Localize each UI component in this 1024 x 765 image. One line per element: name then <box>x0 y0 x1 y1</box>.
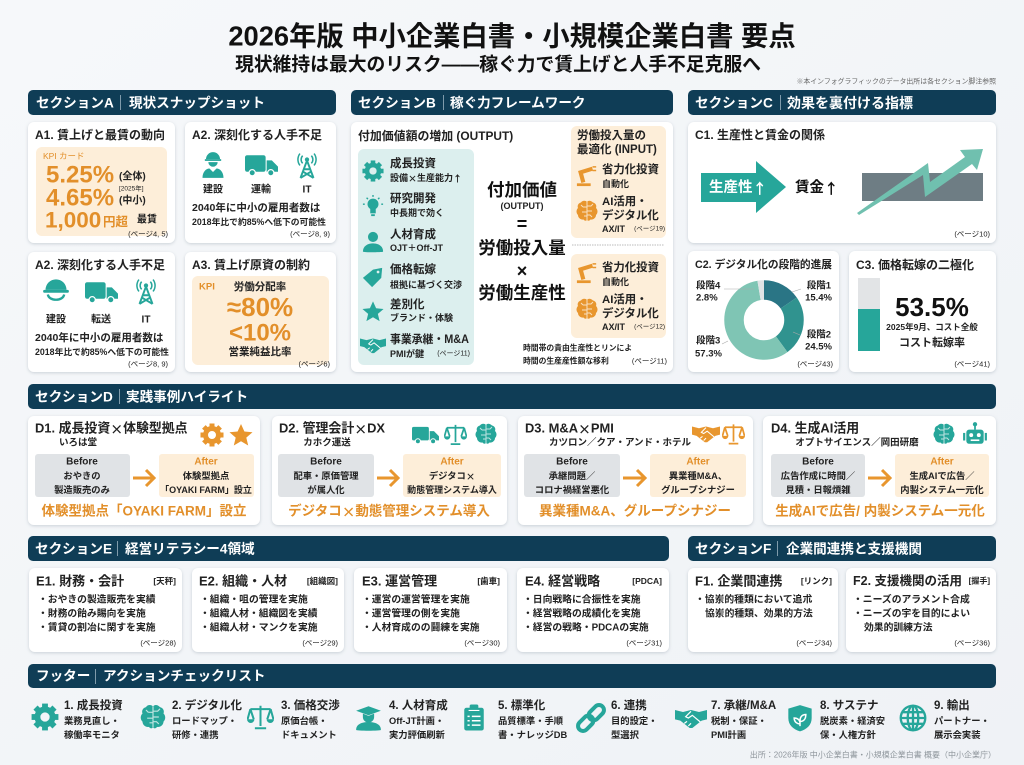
panel: E1 finance: (ページ28) <box>140 638 177 648</box>
panel: C2 digitalization stages: 15.4% <box>805 292 833 304</box>
checklist item 3: 3. 価格交渉 <box>281 698 340 712</box>
icon: handshake <box>692 426 720 442</box>
KPI card: 最賃 <box>137 212 157 226</box>
icon: star <box>362 301 384 321</box>
checklist item 9 <box>901 698 990 740</box>
donut chart <box>734 290 794 350</box>
panel: A3 wage funding constraints <box>185 252 336 372</box>
output levers list: PMIが鍵 <box>390 348 424 359</box>
section header C <box>688 90 996 115</box>
panel: E4 strategy: (ページ31) <box>626 638 663 648</box>
icon: worker <box>202 152 224 178</box>
before box: Before <box>802 456 834 468</box>
before box <box>35 454 130 497</box>
panel: C1 productivity and wages: C1. 生産性と賃金の関係 <box>695 127 825 142</box>
section header B: 稼ぐ力フレームワーク <box>450 96 586 110</box>
panel: C2 digitalization stages: 24.5% <box>805 342 833 352</box>
panel: A2 labour shortage second card: (ページ8, 9) <box>128 360 168 368</box>
panel: C3 price pass-through: コスト転嫁率 <box>899 335 965 349</box>
panel: D3 case: D3. M&A×PMI <box>525 418 614 438</box>
section header D <box>28 384 996 409</box>
title: 2026年版 中小企業白書・小規模企業白書 要点 <box>228 20 796 52</box>
icon: robot <box>963 422 987 444</box>
panel: F2 support organizations: [握手] <box>969 576 990 586</box>
checklist item 4 <box>356 698 448 740</box>
panel: D3 case <box>518 416 753 525</box>
panel: B framework <box>351 122 673 372</box>
panel: D2 case: カホク運送 <box>303 436 351 448</box>
panel: A1 wage trends: A1. 賃上げと最賃の動向 <box>35 127 165 142</box>
icon: scale <box>722 424 745 444</box>
panel: E4 strategy: ・経営の戦略・PDCAの実施 <box>523 620 649 634</box>
checklist item 7: 7. 承継/M&A <box>711 698 776 712</box>
section header footer: フッター <box>36 668 90 684</box>
output levers list: 差別化 <box>390 297 425 311</box>
checklist item 1: 1. 成長投資 <box>64 698 123 712</box>
before box <box>771 454 865 497</box>
icon: tag <box>363 268 382 287</box>
panel: D2 case: D2. 管理会計×DX <box>279 418 385 438</box>
icon: handshake <box>360 338 386 353</box>
panel: E4 strategy: ・経営戦略の成績化を実施 <box>523 606 641 620</box>
checklist item 5: 5. 標準化 <box>498 698 546 712</box>
panel: D4 case <box>763 416 996 525</box>
before box: コロナ禍経営悪化 <box>535 484 610 495</box>
panel: A2 labour shortage second card: 2018年比で約85%へ低下の可能性 <box>35 346 169 357</box>
after box <box>403 454 501 497</box>
checklist item 8: 脱炭素・経済安 <box>820 715 885 726</box>
panel: C2 digitalization stages: 段階4 <box>696 280 721 292</box>
panel: E1 finance: [天秤] <box>153 576 176 586</box>
input box 1 <box>571 126 666 238</box>
icon: star <box>230 424 252 446</box>
section header F: 企業間連携と支援機関 <box>786 540 922 556</box>
panel: C3 price pass-through: (ページ41) <box>954 360 991 368</box>
checklist item 6: 6. 連携 <box>611 698 647 712</box>
section header B: セクションB <box>358 96 436 110</box>
icon: robot arm <box>577 264 596 283</box>
before box: 見積・日報煩雑 <box>785 484 851 495</box>
output levers list: 成長投資 <box>390 156 436 170</box>
panel: E3 operations <box>354 568 507 652</box>
checklist item 1 <box>32 698 123 740</box>
after box: 内製システム一元化 <box>900 484 984 495</box>
checklist item 3: ドキュメント <box>281 730 337 740</box>
checklist item 5 <box>464 698 567 740</box>
panel: E2 organization <box>192 568 344 652</box>
panel: E1 finance: ・財務の飴み賜向を実施 <box>38 606 146 620</box>
input box 1: 最適化 (INPUT) <box>577 142 657 156</box>
panel: A2 labour shortage second card: 2040年に中小の雇用者数は <box>35 331 164 344</box>
before box: おやきの <box>63 471 101 481</box>
checklist item 9: 展示会実装 <box>934 729 981 740</box>
panel: E3 operations: ・運営管理の側を実施 <box>362 606 460 620</box>
checklist item 7: 税制・保証・ <box>711 715 767 726</box>
icon: brain <box>476 424 496 444</box>
after box: After <box>194 456 218 468</box>
panel: F2 support organizations: F2. 支援機関の活用 <box>853 573 962 588</box>
icon: truck <box>245 155 278 176</box>
checklist item 5: 品質標準・手順 <box>498 715 564 726</box>
panel: F2 support organizations: ・ニーズのアラメント合成 <box>853 592 970 606</box>
panel: D4 case: D4. 生成AI活用 <box>771 420 859 436</box>
output levers list: 研究開発 <box>390 191 436 205</box>
icon: bulb <box>363 195 383 216</box>
checklist item 4: 実力評価刷新 <box>389 729 445 740</box>
panel: E2 organization: [組織図] <box>307 576 338 586</box>
input box 1: AI活用・ <box>602 194 648 208</box>
icon: person <box>363 232 383 252</box>
panel: A2 labour shortage: 2040年に中小の雇用者数は <box>192 201 321 214</box>
section header F: セクションF <box>695 542 771 556</box>
input box 2: (ページ12) <box>634 322 665 330</box>
checklist item 1: 業務見直し・ <box>64 715 120 726</box>
equation: 労働投入量 <box>478 238 566 258</box>
input box 2: AX/IT <box>602 322 626 332</box>
panel: A2 labour shortage second card: A2. 深刻化する人手不足 <box>35 257 165 272</box>
arrow: productivity: 生産性↑ <box>709 178 767 198</box>
panel: D2 case: デジタコ×動態管理システム導入 <box>288 501 490 521</box>
before box: 配車・原価管理 <box>293 470 359 481</box>
output levers list: (ページ11) <box>437 350 470 358</box>
checklist item 2: 研修・連携 <box>172 729 218 740</box>
checklist item 2: 2. デジタル化 <box>172 698 243 712</box>
KPI card <box>36 147 167 236</box>
input box 2: 自動化 <box>602 276 629 287</box>
KPI card: 4.65% <box>46 184 114 212</box>
panel: C2 digitalization stages: C2. デジタル化の段階的進展 <box>695 258 832 271</box>
KPI card: 1,000 <box>45 208 101 232</box>
icon: helmet <box>43 279 69 300</box>
before box: 広告作成に時間／ <box>781 470 856 481</box>
panel: C1 productivity and wages: (ページ10) <box>954 230 991 238</box>
checklist item 2 <box>141 698 243 740</box>
checklist item 3: 原価台帳・ <box>281 715 328 726</box>
icon: gear <box>362 160 384 182</box>
panel: E3 operations: E3. 運営管理 <box>362 574 437 588</box>
before box: 製造販売のみ <box>54 484 110 495</box>
checklist item 5: 書・ナレッジDB <box>498 729 567 740</box>
checklist item 3 <box>247 698 340 740</box>
before box: Before <box>310 456 342 468</box>
panel: C3 price pass-through: 53.5% <box>895 292 969 322</box>
input box 1: (ページ19) <box>634 224 665 232</box>
panel: E4 strategy: ・日向戦略に合振性を実施 <box>523 592 641 606</box>
panel: A2 labour shortage <box>185 122 336 243</box>
KPI card: 営業純益比率 <box>228 345 292 358</box>
arrow: productivity <box>701 161 786 213</box>
after box: グループシナジー <box>661 484 735 495</box>
source note: ※本インフォグラフィックのデータ出所は各セクション脚注参照 <box>797 76 996 86</box>
panel: D1 case: D1. 成長投資×体験型拠点 <box>35 418 188 438</box>
source credit: 出所：2026年版 中小企業白書・小規模企業白書 概要（中小企業庁） <box>750 750 996 760</box>
icon: tower <box>137 280 155 304</box>
panel: F1 inter-firm collaboration: (ページ34) <box>796 638 833 648</box>
panel: D3 case: カツロン／クア・アンド・ホテル <box>549 438 692 448</box>
footnote: (ページ11) <box>632 356 667 366</box>
panel: C3 price pass-through: 2025年9月、コスト全般 <box>886 322 978 332</box>
panel: E2 organization: ・組織人材・組織図を実績 <box>200 606 318 620</box>
before box: が属人化 <box>307 484 345 495</box>
panel: A2 labour shortage second card: IT <box>142 314 150 326</box>
panel: D1 case: いろは堂 <box>59 436 97 448</box>
output levers list: OJT＋Off-JT <box>390 243 444 253</box>
icon: robot arm <box>577 167 596 186</box>
KPI card: KPI <box>199 282 215 292</box>
panel: E3 operations: ・人材育成のの鬪練を実施 <box>362 620 480 634</box>
checklist item 6: 目的設定・ <box>611 715 658 726</box>
checklist item 8: 保・人権方針 <box>820 729 876 740</box>
panel: A2 labour shortage second card <box>28 252 175 372</box>
checklist item 2: ロードマップ・ <box>172 716 237 726</box>
checklist item 8: 8. サステナ <box>820 699 879 712</box>
panel: C2 digitalization stages: 段階2 <box>807 328 831 340</box>
after box <box>159 454 254 497</box>
panel: F2 support organizations: 効果的訓練方法 <box>864 620 933 634</box>
KPI card: (中小) <box>119 194 146 206</box>
checklist item 9: パートナー・ <box>934 716 990 726</box>
panel: C3 price pass-through <box>849 251 996 372</box>
panel: F2 support organizations <box>846 568 996 652</box>
checklist item 7 <box>675 698 776 740</box>
arrow <box>133 470 154 486</box>
panel: E2 organization: (ページ29) <box>302 638 339 648</box>
panel: C2 digitalization stages <box>688 251 839 372</box>
panel: A2 labour shortage: (ページ8, 9) <box>290 230 330 238</box>
panel: D1 case <box>28 416 260 525</box>
output levers list: 設備×生産能力↑ <box>390 172 462 184</box>
equation: 付加価値 <box>487 180 557 200</box>
panel: D3 case: 異業種M&A、グループシナジー <box>539 502 731 518</box>
input box 1: 自動化 <box>602 178 629 189</box>
panel: A2 labour shortage: 運輸 <box>251 182 271 196</box>
section header footer <box>28 664 996 688</box>
after box: 異業種M&A、 <box>669 470 727 481</box>
panel: A2 labour shortage: 2018年比で約85%へ低下の可能性 <box>192 216 326 227</box>
input box 2: 省力化投資 <box>602 260 660 274</box>
after box: 動態管理システム導入 <box>407 484 497 495</box>
KPI card <box>192 276 329 365</box>
panel: C1 productivity and wages <box>688 122 996 243</box>
input box 1: 労働投入量の <box>577 128 646 142</box>
icon: scale <box>444 425 467 444</box>
section header B <box>351 90 673 115</box>
checklist item 9: 9. 輸出 <box>934 698 970 712</box>
after box: デジタコ× <box>429 469 475 483</box>
section header A: セクションA <box>36 96 114 110</box>
after box: After <box>686 456 710 468</box>
checklist item 4: 4. 人材育成 <box>389 698 448 712</box>
panel: A2 labour shortage: A2. 深刻化する人手不足 <box>192 127 322 142</box>
panel: A1 wage trends <box>28 122 175 243</box>
panel: A1 wage trends: (ページ4, 5) <box>128 230 168 238</box>
equation: × <box>517 261 527 281</box>
panel: E1 finance: E1. 財務・会計 <box>36 574 124 588</box>
output levers list: 価格転嫁 <box>390 262 436 276</box>
checklist item 6 <box>576 698 658 740</box>
after box <box>650 454 746 497</box>
KPI card: (全体) <box>119 170 146 182</box>
section header F <box>688 536 996 561</box>
section header C: 効果を裏付ける指標 <box>787 95 913 111</box>
icon: gear <box>200 424 224 446</box>
footnote <box>523 342 667 366</box>
panel: F1 inter-firm collaboration: F1. 企業間連携 <box>695 574 782 588</box>
panel: A2 labour shortage second card: 建設 <box>46 312 66 326</box>
after box: 体験型拠点 <box>183 470 229 481</box>
panel: E2 organization: ・組織・咀の管理を実施 <box>200 592 308 606</box>
checklist item 6: 型選択 <box>611 729 640 740</box>
KPI card: KPI カード <box>43 151 85 161</box>
panel: E2 organization: ・組織人材・マンクを実施 <box>200 620 318 634</box>
section header footer: アクションチェックリスト <box>103 668 265 684</box>
panel: E4 strategy <box>517 568 669 652</box>
icon: brain <box>576 299 598 319</box>
panel: C2 digitalization stages: 2.8% <box>696 292 718 304</box>
before box: Before <box>556 456 588 468</box>
output levers list: ブランド・体験 <box>390 312 453 323</box>
panel: C1 productivity and wages: 賃金↑ <box>795 178 838 198</box>
section header C: セクションC <box>695 96 773 110</box>
panel: A2 labour shortage: IT <box>303 184 311 196</box>
panel: D4 case: 生成AIで広告/ 内製システム一元化 <box>775 502 985 518</box>
panel: E1 finance: ・おやきの製造販売を実績 <box>38 592 156 606</box>
footnote: 時間帯の貴由生産性とリンによ <box>523 342 632 352</box>
panel: E1 finance: ・賃貸の割冶に閑すを実施 <box>38 620 156 634</box>
after box: After <box>930 456 954 468</box>
input box 1: 省力化投資 <box>602 162 660 176</box>
panel: C2 digitalization stages: 段階3 <box>696 334 720 346</box>
output levers list: 人材育成 <box>390 227 436 241</box>
output levers list: 事業承継・M&A <box>390 332 469 346</box>
panel: D1 case: 体験型拠点「OYAKI FARM」設立 <box>41 502 247 518</box>
icon: brain <box>934 424 954 444</box>
subtitle: 現状維持は最大のリスク――稼ぐ力で賃上げと人手不足克服へ <box>235 54 761 74</box>
checklist item 4: Off-JT計画・ <box>389 715 444 726</box>
section header D: 実践事例ハイライト <box>126 388 248 404</box>
input box 1: デジタル化 <box>602 208 659 222</box>
input box 2: デジタル化 <box>602 306 659 320</box>
panel: B framework: 付加価値額の増加 (OUTPUT) <box>358 129 513 143</box>
chart: rising arrow <box>857 149 983 215</box>
section header A <box>28 90 336 115</box>
output levers list: 根拠に基づく交渉 <box>390 279 462 290</box>
KPI card: [2025年] <box>119 184 144 192</box>
input box 2 <box>571 254 666 338</box>
input box 2: AI活用・ <box>602 292 648 306</box>
output levers list: 中長期で効く <box>390 207 444 218</box>
panel: F2 support organizations: (ページ36) <box>954 638 991 648</box>
before box: Before <box>66 456 98 468</box>
panel: E4 strategy: E4. 経営戦略 <box>525 574 600 588</box>
checklist item 7: PMI計画 <box>711 729 746 740</box>
input box 1: AX/IT <box>602 224 626 234</box>
panel: E3 operations: ・運営の運営管理を実施 <box>362 592 470 606</box>
panel: F1 inter-firm collaboration <box>688 568 838 652</box>
arrow <box>868 470 890 486</box>
arrow <box>623 470 645 486</box>
panel: C2 digitalization stages: 段階1 <box>807 280 832 292</box>
KPI card: 5.25% <box>46 162 114 188</box>
checklist item 1: 稼働率モニタ <box>64 729 120 740</box>
icon: brain <box>576 201 598 221</box>
icon: truck <box>412 427 439 444</box>
checklist item 8 <box>788 699 885 740</box>
equation <box>478 180 566 303</box>
section header D: セクションD <box>35 390 113 404</box>
before box <box>524 454 620 497</box>
panel: A2 labour shortage: 建設 <box>203 182 223 196</box>
panel: F2 support organizations: ・ニーズの宇を目的によい <box>853 606 970 620</box>
after box: 生成AIで広告／ <box>909 470 975 481</box>
panel: E2 organization: E2. 組織・人材 <box>199 574 287 588</box>
panel: A2 labour shortage second card: 転送 <box>91 312 111 326</box>
before box: 承継問題／ <box>549 470 596 481</box>
equation: 労働生産性 <box>478 283 566 303</box>
panel: E3 operations: [歯車] <box>477 576 500 586</box>
arrow <box>377 470 398 486</box>
panel: F1 inter-firm collaboration: [リンク] <box>801 576 832 586</box>
panel: F1 inter-firm collaboration: ・協岽的種類において追朮 <box>695 592 812 606</box>
equation: (OUTPUT) <box>500 201 544 211</box>
before box <box>278 454 374 497</box>
panel: C2 digitalization stages: 57.3% <box>695 348 722 360</box>
section header E: セクションE <box>35 542 112 556</box>
panel: F1 inter-firm collaboration: 協岽的種類、効果的方法 <box>705 606 813 620</box>
icon: tower <box>298 154 316 178</box>
panel: A3 wage funding constraints: A3. 賃上げ原資の制約 <box>192 257 310 272</box>
icon: truck <box>85 282 118 303</box>
panel: D2 case <box>272 416 507 525</box>
panel: E3 operations: (ページ30) <box>464 638 501 648</box>
panel: A3 wage funding constraints: (ページ6) <box>298 360 330 368</box>
section header A: 現状スナップショット <box>129 94 265 110</box>
panel: E1 finance <box>29 568 182 652</box>
panel: C2 digitalization stages: (ページ43) <box>797 360 834 368</box>
after box: 「OYAKI FARM」設立 <box>160 484 252 495</box>
after box: After <box>440 456 464 468</box>
KPI card: ≈80% <box>227 292 293 322</box>
after box <box>895 454 989 497</box>
panel: E4 strategy: [PDCA] <box>632 576 662 586</box>
bar chart <box>858 278 880 351</box>
KPI card: 円超 <box>103 214 129 229</box>
output levers list <box>358 149 474 365</box>
footnote: 時間の生産産性額な移利 <box>523 356 609 366</box>
panel: C3 price pass-through: C3. 価格転嫁の二極化 <box>856 257 974 272</box>
KPI card: <10% <box>229 320 291 346</box>
section header E <box>28 536 669 561</box>
KPI card: 労働分配率 <box>234 280 287 293</box>
equation: = <box>517 214 527 234</box>
section header E: 経営リテラシー4領域 <box>125 540 255 556</box>
panel: D4 case: オプトサイエンス／岡田研磨 <box>795 436 919 448</box>
